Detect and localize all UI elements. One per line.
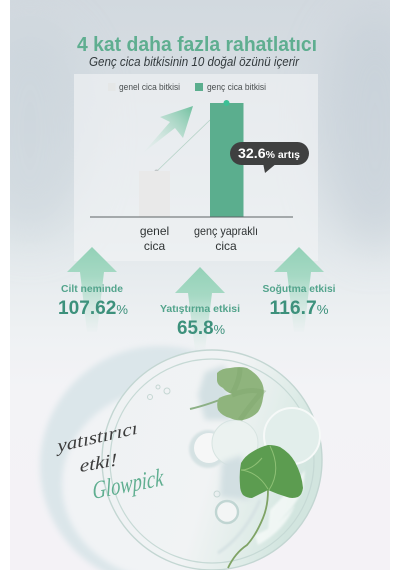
lower leaf shadow (220, 455, 250, 500)
subtitle: Genç cica bitkisinin 10 doğal özünü içerir (89, 55, 300, 69)
stat: cilt neminde (58, 283, 128, 319)
axis label: genel cica: cica (144, 239, 165, 253)
chart legend: genel cica bitkisi (119, 82, 180, 93)
axis label: genel cica: genel (140, 224, 169, 238)
droplet left (194, 433, 218, 463)
chart axis (90, 216, 293, 218)
stat: cilt neminde: 107.62% (58, 298, 128, 319)
stat: soğutma etkisi (262, 283, 336, 319)
axis label: genç yapraklı cica: cica (215, 239, 237, 253)
trend line (154, 120, 210, 174)
arrow: yatıştırma etkisi (175, 267, 225, 350)
dish shadow (39, 346, 194, 570)
handwriting: yatıstırıcı: yatıstırıcı (54, 418, 138, 457)
bar: genç yapraklı cica (210, 100, 244, 217)
diagonal growth arrow (143, 106, 193, 153)
callout: 32.6% artış: 32.6% artış (238, 146, 300, 161)
dish body (102, 350, 322, 570)
stat: yatıştırma etkisi: 65.8% (177, 318, 225, 339)
chart legend: genç cica bitkisi (207, 82, 266, 93)
bar: genel cica (139, 171, 170, 217)
title: 4 kat daha fazla rahatlatıcı (77, 34, 317, 56)
top leaf shadow (198, 365, 232, 420)
stat: soğutma etkisi: Soğutma etkisi (262, 283, 336, 295)
stat: yatıştırma etkisi (160, 303, 240, 339)
streak shadow (218, 500, 260, 553)
callout: 32.6% artış (230, 142, 309, 173)
stat: yatıştırma etkisi: Yatıştırma etkisi (160, 303, 240, 315)
axis label: genç yapraklı cica: genç yapraklı (194, 224, 258, 238)
shadow behind left droplet (188, 430, 221, 468)
droplet ring (216, 501, 238, 523)
lower leaf (228, 445, 303, 568)
handwriting: Glowpick: Glowpick (92, 464, 165, 505)
arrow: cilt neminde (67, 247, 117, 332)
arrow: soğutma etkisi (274, 247, 324, 332)
chart panel (74, 74, 318, 261)
droplet centre (212, 420, 258, 466)
stat: soğutma etkisi: 116.7% (270, 298, 329, 319)
petri dish photo (40, 346, 322, 570)
chart legend (108, 82, 266, 93)
small bubbles (148, 385, 220, 497)
handwriting: etki!: etki! (79, 449, 118, 476)
shadow inner light (61, 398, 198, 570)
liquid streaks (255, 470, 305, 545)
dish inner rim (110, 359, 314, 563)
top leaf (190, 367, 264, 420)
stat: cilt neminde: Cilt neminde (61, 283, 123, 295)
large droplet right (264, 408, 320, 464)
